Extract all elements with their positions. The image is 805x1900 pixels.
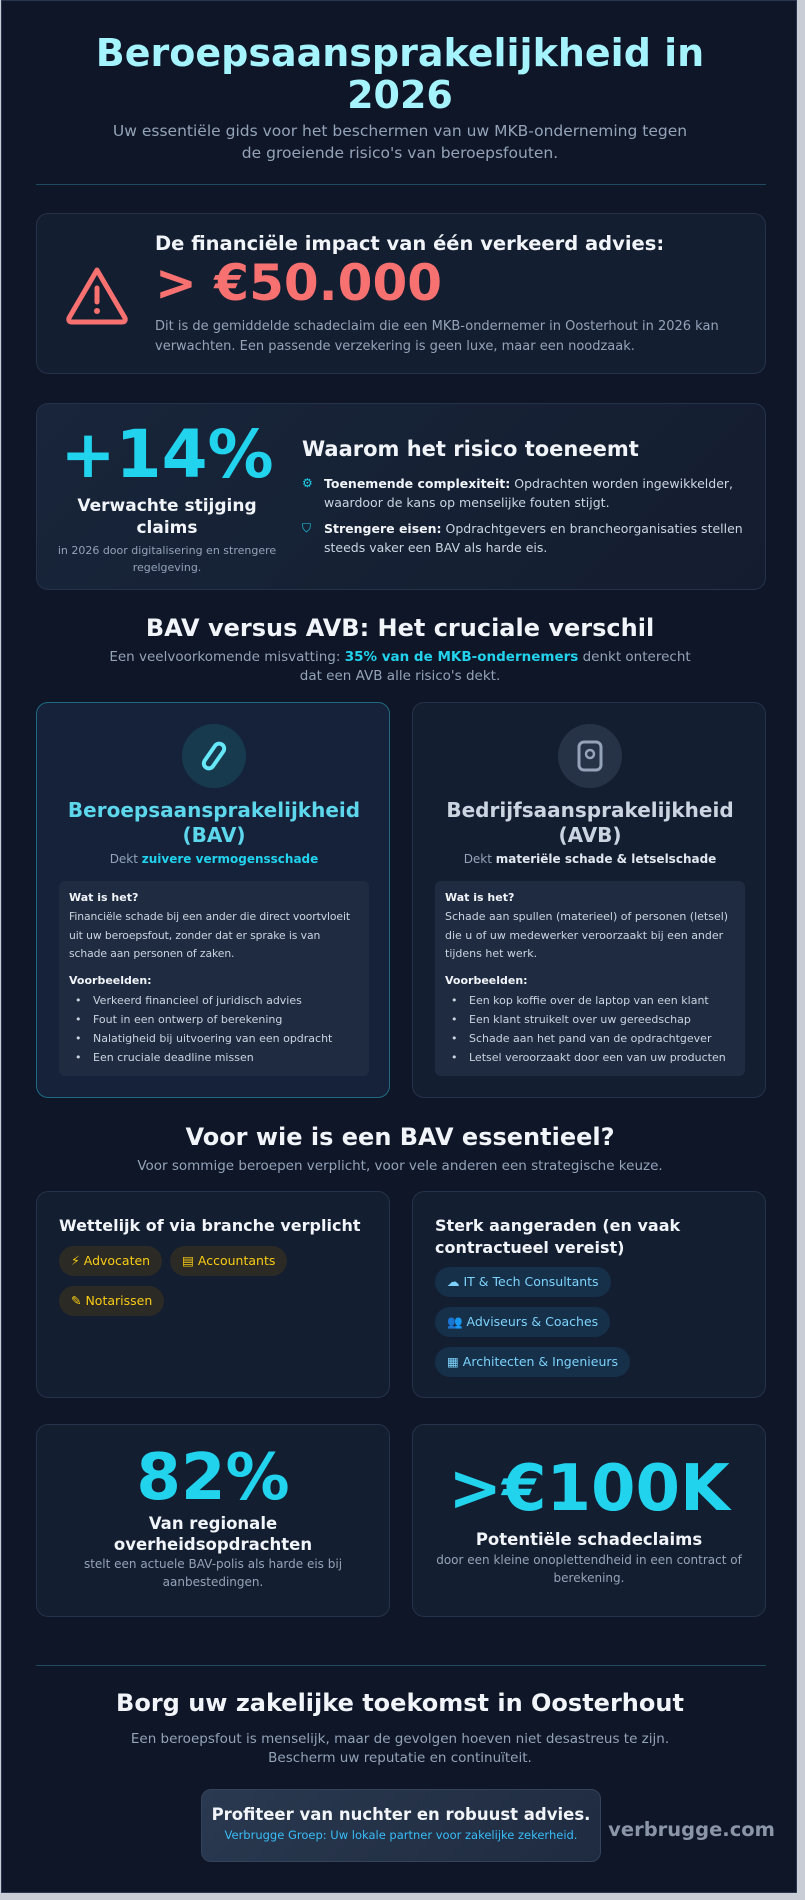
icon: device <box>558 724 622 788</box>
inner box: Voorbeelden: <box>445 974 528 986</box>
pills <box>435 1267 630 1377</box>
card: AVB <box>412 702 766 1098</box>
stat: 82%: Van regionale overheidsopdrachten <box>114 1514 312 1554</box>
pills: 👥 Adviseurs & Coaches <box>447 1314 598 1329</box>
sub: Dekt zuivere vermogensschade <box>110 852 318 866</box>
inner box: Letsel veroorzaakt door een van uw producten <box>469 1050 726 1064</box>
title: (AVB) <box>558 823 622 847</box>
stat: 100K: door een kleine onoplettendheid in een contract of berekening. <box>436 1553 742 1585</box>
heading: De financiële impact van één verkeerd advies: <box>155 232 664 255</box>
title <box>96 31 704 117</box>
stat: 82%: stelt een actuele BAV-polis als harde eis bij aanbestedingen. <box>84 1557 342 1589</box>
icon: link <box>182 724 246 788</box>
card: verplicht: Wettelijk of via branche verplicht <box>59 1216 360 1235</box>
item: requirements: ⛉ <box>302 521 311 535</box>
big number: > €50.000 <box>155 254 442 312</box>
title: Beroepsaansprakelijkheid in <box>96 31 704 75</box>
heading: closing: Borg uw zakelijke toekomst in Oosterhout <box>116 1689 684 1717</box>
brand: verbrugge.com <box>608 1818 775 1841</box>
inner box: Wat is het? <box>69 891 138 904</box>
inner box: Fout in een ontwerp of berekening <box>93 1012 282 1026</box>
pills <box>59 1246 287 1316</box>
card: verplicht <box>36 1191 390 1398</box>
subtitle: Voor sommige beroepen verplicht, voor vele anderen een strategische keuze. <box>137 1158 663 1174</box>
stat +14% <box>58 416 276 574</box>
stat: 82% <box>36 1424 390 1617</box>
item: complexity: ⚙ <box>302 476 313 490</box>
inner box <box>59 881 369 1076</box>
inner box: Een kop koffie over de laptop van een klant <box>469 994 709 1006</box>
heading: voor wie: Voor wie is een BAV essentieel? <box>185 1123 615 1151</box>
sub: Dekt materiële schade & letselschade <box>464 852 716 866</box>
subtitle: Uw essentiële gids voor het beschermen van uw MKB-onderneming tegen de groeiende risico's van beroepsfouten. <box>113 122 687 162</box>
inner box: Schade aan het pand van de opdrachtgever <box>469 1032 711 1044</box>
stat +14%: +14% <box>60 416 274 493</box>
inner box: Een klant struikelt over uw gereedschap <box>469 1012 691 1026</box>
pills: ▤ Accountants <box>182 1253 275 1268</box>
inner box: Financiële schade bij een ander die direct voortvloeit uit uw beroepsfout, zonder dat er sprake is van schade aan personen of zaken. <box>69 910 350 960</box>
inner box: Wat is het? <box>445 891 514 904</box>
title <box>68 798 360 847</box>
inner box: Schade aan spullen (materieel) of personen (letsel) die u of uw medewerker veroorzaakt bij een ander tijdens het werk. <box>445 910 728 960</box>
title: 2026 <box>347 73 453 117</box>
inner box: Nalatigheid bij uitvoering van een opdracht <box>93 1032 332 1044</box>
stat +14%: Verwachte stijging claims <box>77 496 257 538</box>
title: Bedrijfsaansprakelijkheid <box>446 798 734 822</box>
pills: ▦ Architecten & Ingenieurs <box>447 1354 618 1369</box>
CTA box <box>201 1789 601 1862</box>
title: Beroepsaansprakelijkheid <box>68 798 360 822</box>
closing text: Een beroepsfout is menselijk, maar de gevolgen hoeven niet desastreus te zijn. <box>131 1731 669 1747</box>
stat: 100K: Potentiële schadeclaims <box>476 1530 702 1549</box>
card: BAV <box>36 702 390 1098</box>
CTA box: Profiteer van nuchter en robuust advies. <box>212 1805 590 1824</box>
panel: risk increase <box>36 403 766 590</box>
title <box>446 798 734 847</box>
stat +14%: in 2026 door digitalisering en strengere regelgeving. <box>58 544 276 574</box>
heading: BAV vs AVB: BAV versus AVB: Het cruciale verschil <box>146 614 654 642</box>
closing text <box>131 1731 669 1766</box>
CTA box: Verbrugge Groep: Uw lokale partner voor zakelijke zekerheid. <box>225 1828 577 1842</box>
pills: ⚡ Advocaten <box>71 1253 150 1268</box>
icon: warning triangle <box>66 268 128 324</box>
panel: financial impact <box>36 213 766 374</box>
item: complexity: Toenemende complexiteit: Opdrachten worden ingewikkelder, waardoor de kans op menselijke fouten stijgt. <box>324 476 733 510</box>
card: aangeraden <box>412 1191 766 1398</box>
stat: 100K: >€100K <box>448 1452 730 1526</box>
pills: ☁ IT & Tech Consultants <box>447 1274 599 1289</box>
inner box <box>435 881 745 1076</box>
pills: ✎ Notarissen <box>71 1293 152 1308</box>
text: Dit is de gemiddelde schadeclaim die een MKB-ondernemer in Oosterhout in 2026 kan verwachten. Een passende verzekering is geen luxe, maar een noodzaak. <box>155 319 719 354</box>
stat: 100K <box>412 1424 766 1617</box>
inner box: Voorbeelden: <box>69 974 152 986</box>
item: requirements: Strengere eisen: Opdrachtgevers en brancheorganisaties stellen steeds vaker een BAV als harde eis. <box>324 521 743 555</box>
inner box: Verkeerd financieel of juridisch advies <box>93 994 302 1006</box>
inner box: Een cruciale deadline missen <box>93 1050 254 1064</box>
subtitle: Een veelvoorkomende misvatting: 35% van de MKB-ondernemers denkt onterecht dat een AVB alle risico's dekt. <box>109 649 691 684</box>
closing text: Bescherm uw reputatie en continuïteit. <box>268 1750 532 1766</box>
title: (BAV) <box>182 823 246 847</box>
card: aangeraden: Sterk aangeraden (en vaak contractueel vereist) <box>435 1216 680 1257</box>
heading: why: Waarom het risico toeneemt <box>302 437 639 461</box>
stat: 82%: 82% <box>136 1441 290 1515</box>
